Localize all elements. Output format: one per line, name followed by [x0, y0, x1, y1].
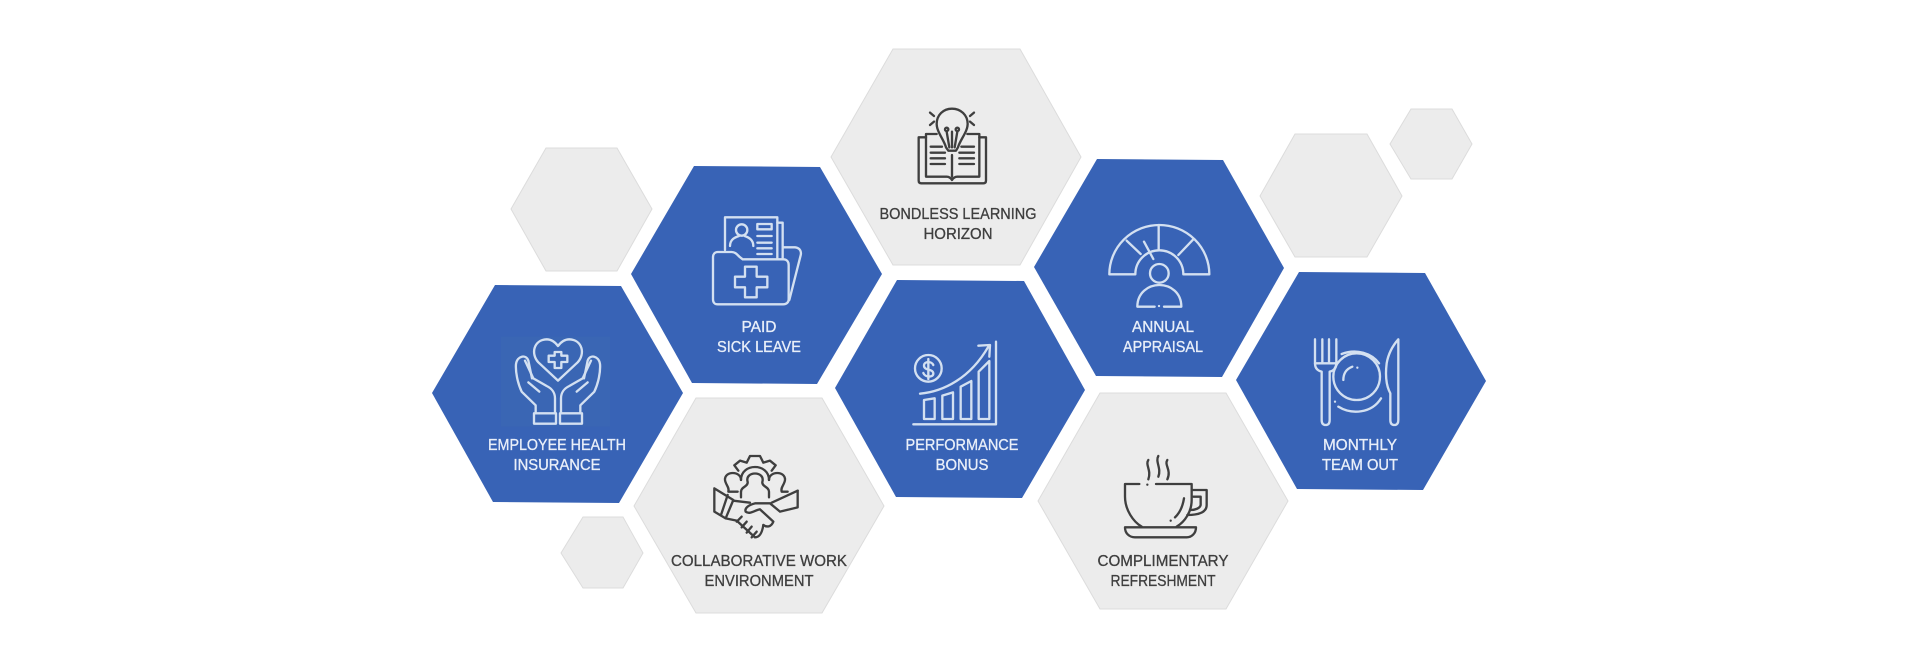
decorative hexagon: upper right small — [1390, 109, 1472, 179]
icon: gauge and person — [1109, 225, 1209, 307]
label: bondless learning horizon: BONDLESS LEARNING — [880, 206, 1036, 223]
decorative hexagon: upper left — [511, 148, 652, 271]
label: complimentary refreshment — [1098, 553, 1228, 590]
label: collaborative work environment: COLLABORATIVE WORK — [671, 553, 848, 570]
label: annual appraisal — [1123, 319, 1203, 356]
label: performance bonus: PERFORMANCE — [906, 437, 1018, 454]
label: complimentary refreshment: COMPLIMENTARY — [1098, 553, 1228, 570]
panel: bondless learning horizon — [831, 49, 1081, 265]
label: employee health insurance — [488, 437, 626, 474]
label: annual appraisal: APPRAISAL — [1123, 339, 1203, 356]
label: bondless learning horizon — [880, 206, 1036, 243]
label: performance bonus — [906, 437, 1018, 474]
label: employee health insurance: INSURANCE — [514, 457, 600, 474]
icon: light bulb over book — [919, 109, 986, 183]
label: paid sick leave: PAID — [742, 319, 776, 336]
panel: paid sick leave — [631, 166, 882, 384]
icon: handshake with team and gear — [714, 456, 798, 537]
icon: fork, plate and knife — [1315, 339, 1398, 425]
label: monthly team out: MONTHLY — [1323, 437, 1397, 454]
panel: performance bonus — [835, 280, 1085, 498]
label: monthly team out: TEAM OUT — [1322, 457, 1398, 474]
decorative hexagon: upper right — [1260, 134, 1402, 257]
label: paid sick leave: SICK LEAVE — [717, 339, 801, 356]
panel: employee health insurance — [432, 285, 683, 503]
icon: medical folder — [713, 217, 801, 304]
icon: coffee cup — [1125, 456, 1207, 537]
label: employee health insurance: EMPLOYEE HEALTH — [488, 437, 626, 454]
label: performance bonus: BONUS — [936, 457, 988, 474]
panel: collaborative work environment — [634, 398, 884, 613]
label: complimentary refreshment: REFRESHMENT — [1110, 573, 1216, 590]
label: bondless learning horizon: HORIZON — [924, 226, 992, 243]
icon: growth chart with dollar — [913, 342, 996, 424]
panel: monthly team out — [1236, 272, 1486, 490]
label: collaborative work environment: ENVIRONMENT — [704, 573, 814, 590]
decorative hexagon: lower left small — [561, 517, 643, 588]
icon: hands holding heart — [501, 337, 610, 427]
panel: annual appraisal — [1034, 159, 1284, 377]
label: collaborative work environment — [671, 553, 848, 590]
label: annual appraisal: ANNUAL — [1132, 319, 1194, 336]
panel: complimentary refreshment — [1038, 393, 1288, 609]
label: paid sick leave — [717, 319, 801, 356]
label: monthly team out — [1322, 437, 1398, 474]
